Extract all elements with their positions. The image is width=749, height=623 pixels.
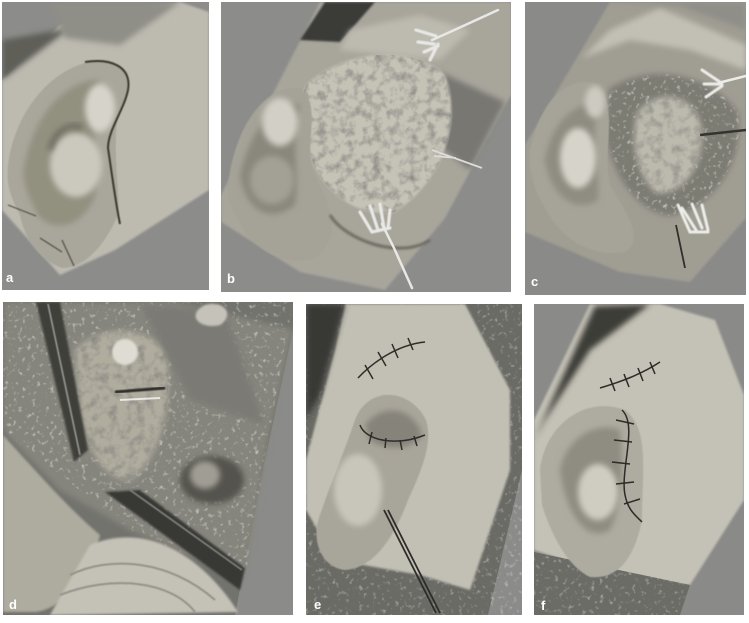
icon: lower retractor blade [105,490,245,590]
exposed tissue [302,55,451,213]
icon: upper retractor [416,10,498,60]
label: d: d [9,597,17,612]
panel d: close-up with instruments [3,302,293,615]
icon: upper retractor [702,70,746,97]
label: b: b [227,271,235,286]
deep wound [605,74,739,216]
incision folds [85,61,128,224]
label: a: a [6,270,14,285]
icon: forceps [432,150,482,168]
icon: sutures [600,362,660,522]
panel c: deeper dissection [525,2,746,295]
icon: sutures [358,338,425,450]
label: e: e [314,597,321,612]
panel b: exposed tissue with retractors [221,2,511,292]
skin flap [3,435,100,612]
label: f: f [541,598,546,613]
panel a: ear before incision [2,2,209,290]
panel e: sutured ear with forceps [306,304,522,615]
icon: lower retractor [360,204,412,288]
label: c: c [531,274,538,289]
icon: forceps [384,510,440,613]
icon: lower retractor [678,204,708,232]
icon: left retractor blade [36,302,88,462]
panel f: final closure [534,304,744,615]
